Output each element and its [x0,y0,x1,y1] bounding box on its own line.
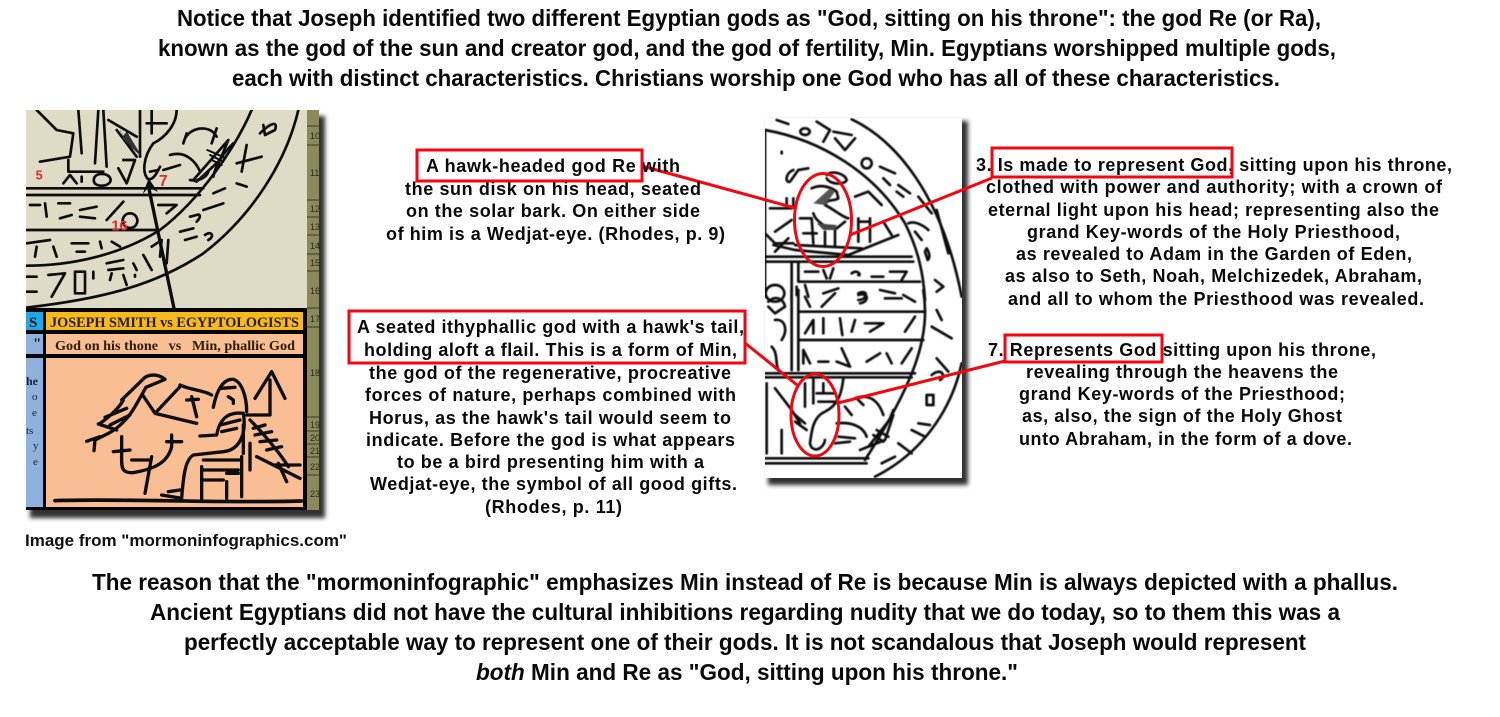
text block: Min description: A seated ithyphallic god with a hawk's tail, [357,317,744,337]
conclusion paragraph: perfectly acceptable way to represent one of their gods. It is not scandalous that Joseph would represent [184,629,1306,655]
chart column header band: S [29,315,37,331]
ruler column of line numbers: 17 [310,314,320,324]
ruler column of line numbers: 13 [310,222,320,232]
title: intro paragraph: Notice that Joseph identified two different Egyptian gods as "God, sitting on his throne": the god Re (or Ra), [177,5,1321,31]
text block: Min description [357,317,744,517]
ruler column of line numbers: 16 [310,286,320,296]
ruler column of line numbers: 14 [310,241,320,251]
title: intro paragraph [158,5,1336,91]
text block: Joseph Smith explanation 3: as also to Seth, Noah, Melchizedek, Abraham, [1005,266,1422,286]
text block: Re description: of him is a Wedjat-eye. (Rhodes, p. 9) [386,224,725,244]
callout box: hawk-headed god Re [417,150,642,181]
chart column header band: y [33,440,39,452]
conclusion paragraph: both Min and Re as "God, sitting upon his throne." [476,659,1018,685]
text block: Joseph Smith explanation 7: as, also, the sign of the Holy Ghost [1022,406,1342,426]
connector: Is made to represent God to figure [850,178,992,235]
text block: Joseph Smith explanation 7 [988,340,1376,449]
text block: Min description: indicate. Before the god is what appears [366,430,735,450]
chart column header band: JOSEPH SMITH vs EGYPTOLOGISTS [50,315,299,331]
chart column header band: ts [26,425,33,437]
ruler column of line numbers: 21 [310,446,320,456]
title: intro paragraph: each with distinct characteristics. Christians worship one God who has all of these characteristics. [232,65,1280,91]
chart column header band: e [32,407,37,419]
text block: Min description: (Rhodes, p. 11) [485,497,622,517]
conclusion paragraph [92,569,1398,685]
text block: Min description: to be a bird presenting him with a [397,452,705,472]
ruler column of line numbers: 22 [310,462,320,472]
text block: Joseph Smith explanation 7: grand Key-words of the Priesthood; [1019,384,1345,404]
connector: Re text to figure [642,166,795,208]
text block: Re description: on the solar bark. On either side [406,201,700,221]
text block: Re description: A hawk-headed god Re with [426,156,680,176]
chart column header band: " [33,336,41,352]
ruler column of line numbers: 19 [310,420,320,430]
text block: Joseph Smith explanation 3: eternal light upon his head; representing also the [988,200,1439,220]
conclusion paragraph: Ancient Egyptians did not have the cultural inhibitions regarding nudity that we do today, so to them this was a [150,599,1341,625]
chart column header band: o [32,391,38,403]
facsimile detail with arrow [20,110,307,308]
lower half of facsimile [765,290,962,477]
ruler column of line numbers: 23 [310,489,320,499]
ruler column of line numbers: 10 [310,131,320,141]
ruler column of line numbers: 12 [310,204,320,214]
facsimile detail with arrow: 16 [111,218,128,234]
highlight ellipse: Min [791,374,839,456]
callout box: seated ithyphallic god [349,311,745,363]
panel: facsimile centre image [765,118,968,485]
text block: Joseph Smith explanation 7: 7. Represents God sitting upon his throne, [988,340,1376,360]
text block: Min description: the god of the regenerative, procreative [369,363,731,383]
text block: Joseph Smith explanation 3: grand Key-words of the Holy Priesthood, [1027,222,1400,242]
text block: Min description: holding aloft a flail. This is a form of Min, [364,340,737,360]
chart column header band: God on his thone vs Min, phallic God [55,339,295,354]
ruler column of line numbers: 11 [310,168,319,178]
chart column header band: e [33,456,38,468]
image credit: Image from "mormoninfographics.com" [25,531,347,550]
text block: Min description: Horus, as the hawk's tail would seem to [369,408,731,428]
text block: Min description: Wedjat-eye, the symbol of all good gifts. [370,474,737,494]
facsimile detail with arrow: 7 [159,173,168,190]
text block: Joseph Smith explanation 3 [976,155,1452,309]
hieroglyph of Min with bird [55,372,302,502]
text block: Re description: the sun disk on his head, seated [405,179,701,199]
text block: Joseph Smith explanation 3: clothed with power and authority; with a crown of [986,177,1443,197]
text block: Joseph Smith explanation 7: unto Abraham, in the form of a dove. [1019,429,1352,449]
upper half of facsimile [765,119,962,302]
text block: Joseph Smith explanation 7: revealing through the heavens the [1026,362,1338,382]
ruler column of line numbers: 20 [310,433,320,443]
callout box: Is made to represent God [992,148,1232,177]
callout box: Represents God [1005,335,1162,362]
text block: Joseph Smith explanation 3: and all to whom the Priesthood was revealed. [1008,289,1424,309]
highlight ellipse: Re [794,174,852,266]
title: intro paragraph: known as the god of the sun and creator god, and the god of fertility, Min. Egyptians worshipped multiple gods, [158,35,1336,61]
text block: Re description [386,156,725,244]
chart column header band [26,308,307,510]
ruler column of line numbers [307,126,320,499]
ruler column of line numbers: 18 [310,368,320,378]
chart column header band: he [26,374,39,388]
conclusion paragraph: The reason that the "mormoninfographic" emphasizes Min instead of Re is because Min is always depicted with a phallus. [92,569,1398,595]
text block: Joseph Smith explanation 3: 3. Is made to represent God, sitting upon his throne, [976,155,1452,175]
panel: mormoninfographics image [20,110,325,518]
text block: Min description: forces of nature, perhaps combined with [365,385,736,405]
connector: Min text to figure [745,343,797,385]
ruler column of line numbers: 15 [310,258,320,268]
facsimile detail with arrow: 5 [36,168,43,182]
connector: Represents God to figure [838,361,1005,403]
text block: Joseph Smith explanation 3: as revealed to Adam in the Garden of Eden, [1016,244,1412,264]
